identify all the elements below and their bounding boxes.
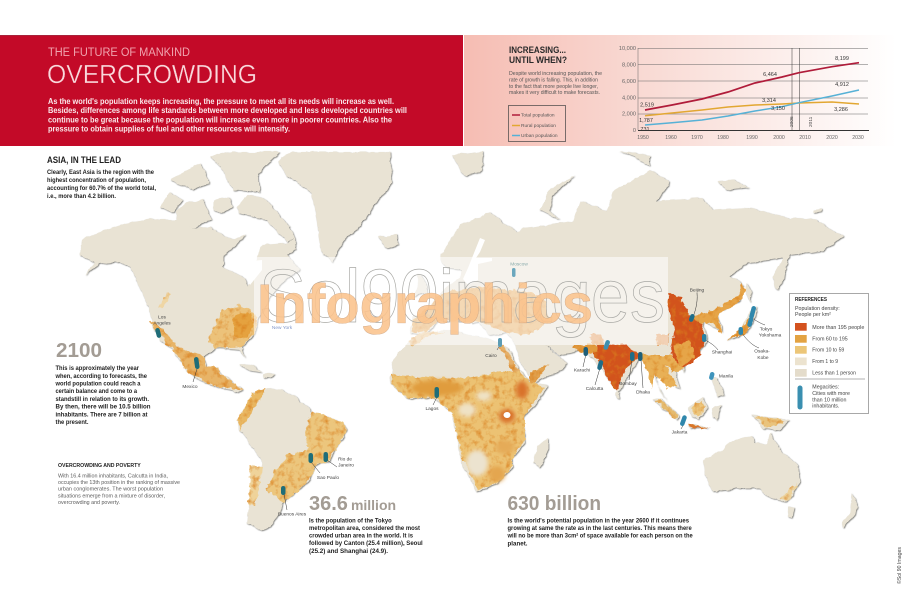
megacity markers and labels [153, 262, 782, 518]
city labels: Cairo [485, 353, 497, 359]
swatch: 1 to 9 [795, 358, 807, 365]
body: metropolitan area, considered the most [309, 525, 421, 532]
density: China [668, 292, 705, 368]
density: Southeast Australia [780, 484, 797, 502]
inland seas [240, 238, 534, 332]
y axis labels [619, 46, 636, 134]
intro paragraph: As the world's population keeps increasing, the pressure to meet all its needs will increase as well. [48, 97, 394, 106]
y axis labels: 2,000 [622, 112, 636, 118]
watermark: Infographics: Infographics [257, 272, 593, 335]
body: overcrowding and poverty. [58, 500, 120, 506]
line: rural population [645, 102, 859, 116]
density: Java [688, 424, 710, 428]
heading: ASIA, IN THE LEAD [47, 155, 121, 165]
text block: 630 billion [507, 493, 693, 547]
x axis labels: 1970 [691, 135, 703, 141]
land masses [80, 151, 858, 530]
density class labels: From 60 to 195 [812, 336, 848, 342]
body [58, 473, 180, 506]
text block: 36.6 million [309, 493, 423, 555]
density: southern Andes [249, 465, 262, 505]
intro paragraph [48, 97, 407, 134]
body: standstill in relation to its growth. [56, 396, 149, 403]
y axis labels: 10,000 [619, 46, 636, 52]
land: Ellesmere Island [210, 152, 280, 192]
marker: Jakarta [679, 415, 687, 427]
legend heading: REFERENCES [795, 297, 827, 303]
marker: Beijing [688, 313, 695, 322]
land: Arctic archipelago [170, 163, 210, 190]
density: South Asia [590, 345, 640, 390]
land: Sumatra [653, 398, 680, 420]
x axis labels: 2000 [773, 135, 785, 141]
panel: population chart [464, 35, 896, 146]
x axis labels: 2010 [799, 135, 811, 141]
land: Africa [390, 330, 547, 492]
megacity label [812, 385, 850, 410]
density class labels: More than 195 people [812, 325, 864, 331]
kicker: THE FUTURE OF MANKIND [48, 47, 190, 59]
density: Sumatra [655, 399, 678, 419]
value labels: 3,150 [771, 106, 785, 112]
marker: Cairo [498, 338, 502, 347]
land: Eurasia [410, 171, 843, 402]
heading: OVERCROWDING AND POVERTY [58, 463, 141, 469]
marker: Dhaka [638, 352, 642, 361]
density: Japan [727, 318, 750, 340]
marker: Yokohama [747, 317, 754, 327]
density: Yemen coast [530, 365, 548, 383]
density: Iran and Afghanistan edge [590, 334, 604, 345]
body [309, 517, 423, 555]
chart description [509, 71, 602, 96]
big number: 36.6million [309, 493, 396, 515]
faded watermark backing panel [254, 257, 668, 345]
density: sub-Saharan Africa [392, 372, 545, 490]
megacity label: than 10 million [812, 397, 847, 403]
swatch: 60 to 195 [795, 335, 807, 343]
density: northwest Africa coast [408, 331, 446, 346]
land: New Zealand [842, 493, 858, 528]
body: certain balance and come to a [56, 388, 137, 395]
density class labels: Less than 1 person [812, 370, 856, 376]
land: Australia [703, 433, 800, 503]
body: followed by Canton (25.4 million), Seoul [309, 540, 423, 547]
line: urban population [645, 90, 859, 125]
x axis labels: 1990 [746, 135, 758, 141]
swatch: 10 to 59 [795, 346, 807, 354]
marker: Rio de Janeiro [324, 452, 328, 462]
land: New Siberian Islands [718, 180, 750, 190]
body: planet. [508, 540, 528, 547]
city labels: New York [272, 325, 293, 331]
city labels: Tokyo [760, 326, 773, 332]
marker: Mexico City [194, 357, 200, 369]
year markers: 2006 [789, 116, 795, 127]
land: Sulawesi [712, 405, 720, 420]
density blob: Great Lakes [499, 409, 515, 423]
land: Sri Lanka [616, 392, 620, 399]
big number: 2100 [56, 340, 102, 362]
body: occupies the 13th position in the ranking of massive [58, 480, 180, 486]
land: Novaya Zemlya [540, 176, 575, 220]
y axis labels: 0 [633, 128, 636, 134]
text block: overcrowding and poverty [58, 463, 180, 506]
city labels: Buenos Aires [278, 512, 307, 518]
chart heading: INCREASING... [509, 45, 566, 56]
year markers [789, 116, 814, 127]
density: Pakistan [572, 345, 598, 353]
land: Java [688, 424, 710, 428]
year markers: 2011 [808, 116, 814, 127]
body: growing at same the rate as in the last centuries. This means there [508, 525, 692, 532]
chart description: rate of growth is falling. This, in addition [509, 78, 598, 84]
text block: Asia in the lead [47, 155, 156, 200]
density blob: Namibia and Botswana [466, 450, 488, 476]
legend subtitle: Population density: [795, 306, 840, 312]
legend subtitle [795, 306, 840, 318]
density variation blobs [411, 380, 528, 482]
intro paragraph: continue to be great because the population will increase even more in poorer countries. Also the [48, 116, 392, 124]
city labels: Janeiro [338, 462, 354, 468]
city labels: Sao Paulo [317, 475, 339, 481]
chart heading: UNTIL WHEN? [509, 55, 567, 66]
marker: Tokyo [749, 306, 756, 319]
chart description: makes it very difficult to make forecasts. [509, 90, 600, 96]
line chart [619, 46, 869, 141]
city labels: Karachi [574, 368, 590, 374]
land: Svalbard [452, 151, 483, 176]
swatch: less than 1 [795, 369, 807, 377]
value labels: 6,464 [763, 72, 777, 78]
marker: Karachi [584, 347, 588, 356]
marker: Manila [709, 371, 715, 380]
city labels: Beijing [690, 288, 705, 294]
density class labels [812, 325, 864, 376]
land: Taiwan [681, 365, 685, 372]
body: This is approximately the year [56, 365, 140, 372]
city labels: Shanghai [712, 350, 732, 356]
body: world population could reach a [55, 380, 141, 388]
Lake Victoria [504, 412, 510, 418]
density: Mexico and Central America [150, 320, 243, 390]
density: United States [208, 305, 258, 348]
value labels: 4,912 [835, 82, 849, 88]
value labels: 8,199 [835, 56, 849, 62]
density: Canadian prairie corridor [158, 292, 171, 309]
density blob: Central African savanna [476, 391, 492, 401]
chart legend: Urban population [521, 133, 558, 139]
title: OVERCROWDING [47, 61, 257, 89]
land: Wrangel Island [813, 209, 822, 213]
body: urban conglomerates. The worst population [58, 487, 163, 493]
y axis labels: 4,000 [622, 96, 636, 102]
x axis labels: 1960 [665, 135, 677, 141]
chart legend: Rural population [521, 123, 556, 129]
density: Nile [498, 343, 520, 372]
city labels: Kobe [757, 355, 769, 361]
world population density map [80, 151, 858, 530]
marker: Bombay [630, 352, 634, 361]
swatch: more than 195 [795, 323, 807, 331]
marker: Shanghai [702, 334, 706, 342]
land: South America [237, 388, 347, 530]
land: Madagascar [533, 438, 548, 468]
x axis labels: 2030 [852, 135, 864, 141]
text block: 2100 [55, 340, 151, 426]
land: Tasmania [787, 507, 795, 518]
marker: Los Angeles [155, 328, 162, 338]
value labels: 1,787 [639, 118, 653, 124]
body: i.e., more than 4.2 billion. [47, 194, 116, 200]
value labels: 3,314 [762, 98, 776, 104]
body: (25.2) and Shanghai (24.9). [309, 548, 388, 555]
density: Northeast China [690, 283, 746, 333]
land: New Guinea [752, 415, 790, 430]
chart legend: Total population [521, 113, 555, 119]
body: the present. [56, 419, 89, 426]
city labels: Lagos [425, 406, 439, 412]
land: Sakhalin [746, 283, 752, 302]
marker: Buenos Aires [281, 486, 286, 495]
land: Philippines [710, 377, 725, 397]
land: Iceland [378, 235, 398, 248]
city labels: Osaka- [754, 348, 770, 354]
land: Somerset Island [213, 197, 233, 213]
city labels: Manila [719, 374, 733, 380]
land: Cuba [238, 364, 262, 372]
body: Is the population of the Tokyo [309, 517, 392, 524]
body: highest concentration of population, [47, 178, 146, 184]
megacity label: Megacities: [812, 385, 839, 391]
watermark: Sol90images outline: Sol90images [259, 254, 665, 338]
density: western China edge [655, 334, 668, 345]
marker: Sao Paulo [308, 453, 313, 463]
value labels: 2,519 [640, 102, 654, 108]
body [47, 170, 156, 200]
body: Is the world's potential population in the year 2600 if it continues [508, 517, 689, 524]
land: Borneo [688, 397, 708, 420]
population density shading [150, 283, 797, 505]
city labels: Mexico [182, 384, 198, 390]
density: Europe and Mediterranean band [412, 287, 550, 335]
chart heading [509, 45, 567, 66]
value labels: 3,286 [834, 107, 848, 113]
body: accounting for 60.7% of the world total, [47, 186, 156, 192]
intro paragraph: Besides, differences among life standards between more developed and less developed countries will [48, 106, 407, 115]
chart legend [508, 106, 566, 142]
intro paragraph: pressure to obtain supplies of fuel and other resources will intensify. [48, 124, 290, 134]
density: eastern United States core [232, 312, 254, 338]
city labels: Calcutta [586, 386, 604, 392]
land: Japan [727, 306, 757, 340]
body: when, according to forecasts, the [55, 373, 147, 380]
value labels [639, 56, 849, 133]
land: Banks Island [160, 192, 183, 213]
megacity label: Cities with more [812, 391, 850, 397]
density: New Guinea [755, 416, 785, 427]
density: Southeast Asia [640, 355, 683, 388]
x axis labels: 1980 [717, 135, 729, 141]
legend subtitle: People per km² [795, 312, 831, 318]
body: situations emerge from a mixture of disorder, [58, 493, 165, 499]
city labels: Angeles [153, 320, 171, 326]
city labels: Rio de [338, 456, 352, 462]
land: Severnaya Zemlya [620, 151, 650, 166]
legend: references [790, 294, 868, 414]
city labels: Los [158, 314, 166, 320]
land: Victoria Island [175, 200, 212, 228]
city labels: Yokohama [759, 332, 782, 338]
body: Clearly, East Asia is the region with the [47, 170, 155, 176]
city labels: Jakarta [672, 430, 688, 436]
density blob: Congo basin [458, 403, 476, 417]
body [55, 365, 151, 426]
density blob: Mozambique [489, 466, 505, 482]
density class labels: From 1 to 9 [812, 359, 838, 365]
density: northern Andes [237, 388, 267, 430]
body: With 16.4 million inhabitants, Calcutta in India, [58, 473, 168, 479]
megacity label: inhabitants. [812, 404, 839, 410]
density blob: West Africa [411, 380, 463, 396]
chart description: to the fact that more people live longer, [509, 84, 598, 90]
city labels: Dhaka [636, 390, 650, 396]
density: eastern South America [267, 412, 347, 503]
marker: Calcutta [597, 360, 604, 370]
leader lines [193, 293, 765, 510]
copyright credit: ©Sol 90 Images [896, 547, 903, 584]
x axis labels [637, 135, 864, 141]
y axis labels: 8,000 [622, 62, 636, 68]
land: Great Britain [414, 273, 427, 296]
big number: 630 billion [508, 493, 601, 515]
land: Baffin Island [237, 195, 295, 242]
body: inhabitants. There are 7 billion at [56, 412, 148, 418]
gridlines and axes [638, 48, 869, 130]
body: crowded urban area in the world. It is [309, 532, 413, 539]
value labels: 731 [640, 127, 650, 133]
land: Hispaniola [263, 373, 275, 378]
density blob: Tanzania [496, 440, 514, 454]
body [507, 517, 693, 547]
land: North America [80, 219, 300, 392]
city labels: Moscow [510, 262, 528, 268]
megacity icon [798, 386, 802, 410]
density: Borneo [690, 400, 706, 418]
density blob: Ethiopia [516, 381, 528, 399]
city labels: Bombay [619, 381, 637, 387]
body: By then, there will be 10.5 billion [56, 404, 151, 410]
chart description: Despite world increasing population, the [509, 71, 602, 77]
y axis labels: 6,000 [622, 79, 636, 85]
marker: Delhi [603, 339, 611, 350]
city labels [153, 262, 782, 518]
density: South China highlands [672, 340, 695, 366]
marker: Osaka-Kobe [738, 327, 743, 335]
line: total population [645, 63, 859, 110]
x axis labels: 2020 [826, 135, 838, 141]
header panel: title [0, 35, 463, 146]
body: will no be more than 3cm² of space available for each person on the [507, 532, 693, 540]
x axis labels: 1950 [637, 135, 649, 141]
marker: Lagos [434, 387, 439, 398]
density class labels: From 10 to 59 [812, 348, 844, 354]
land: Greenland [277, 152, 392, 262]
marker: Moscow [512, 268, 516, 277]
